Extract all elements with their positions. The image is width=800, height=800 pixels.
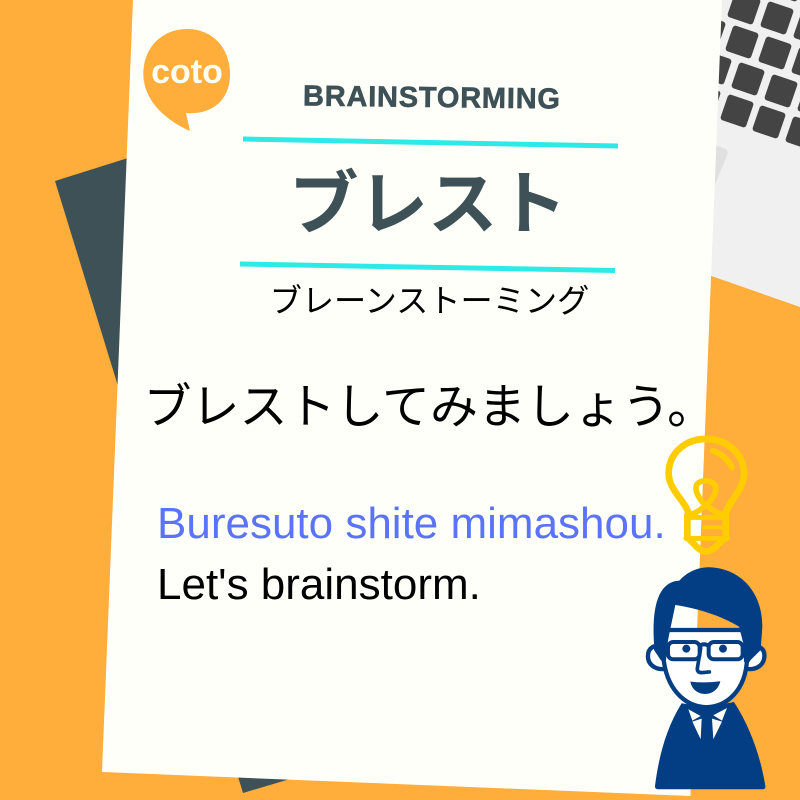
ears bbox=[648, 646, 764, 669]
example sentence in Japanese: ブレストしてみましょう。 bbox=[144, 381, 715, 434]
face bbox=[663, 630, 747, 707]
laptop bbox=[687, 0, 800, 307]
laptop trackpad corner bbox=[700, 140, 728, 192]
icon: light bulb bbox=[669, 439, 744, 551]
laptop keys bbox=[687, 0, 800, 150]
eyes bbox=[682, 645, 690, 653]
glasses bbox=[668, 642, 743, 659]
suit bbox=[655, 702, 765, 789]
hair bbox=[654, 567, 762, 663]
title: ブレスト: ブレスト bbox=[289, 165, 567, 243]
cyan line bottom bbox=[240, 262, 615, 273]
romaji sentence: Buresuto shite mimashou. bbox=[157, 499, 666, 548]
coto logo bbox=[143, 29, 230, 131]
paper sheet bbox=[102, 0, 722, 796]
coto logo: coto bbox=[151, 53, 223, 91]
reading: ブレーンストーミング: ブレーンストーミング bbox=[270, 283, 589, 319]
cyan line top bbox=[243, 136, 618, 148]
English sentence: Let's brainstorm. bbox=[157, 560, 481, 609]
dark folder behind paper bbox=[55, 104, 300, 793]
character: man with glasses bbox=[648, 567, 765, 789]
collar and shirt bbox=[688, 708, 727, 739]
label: BRAINSTORMING: BRAINSTORMING bbox=[303, 80, 560, 116]
mouth bbox=[690, 681, 720, 694]
nose bbox=[697, 648, 709, 673]
